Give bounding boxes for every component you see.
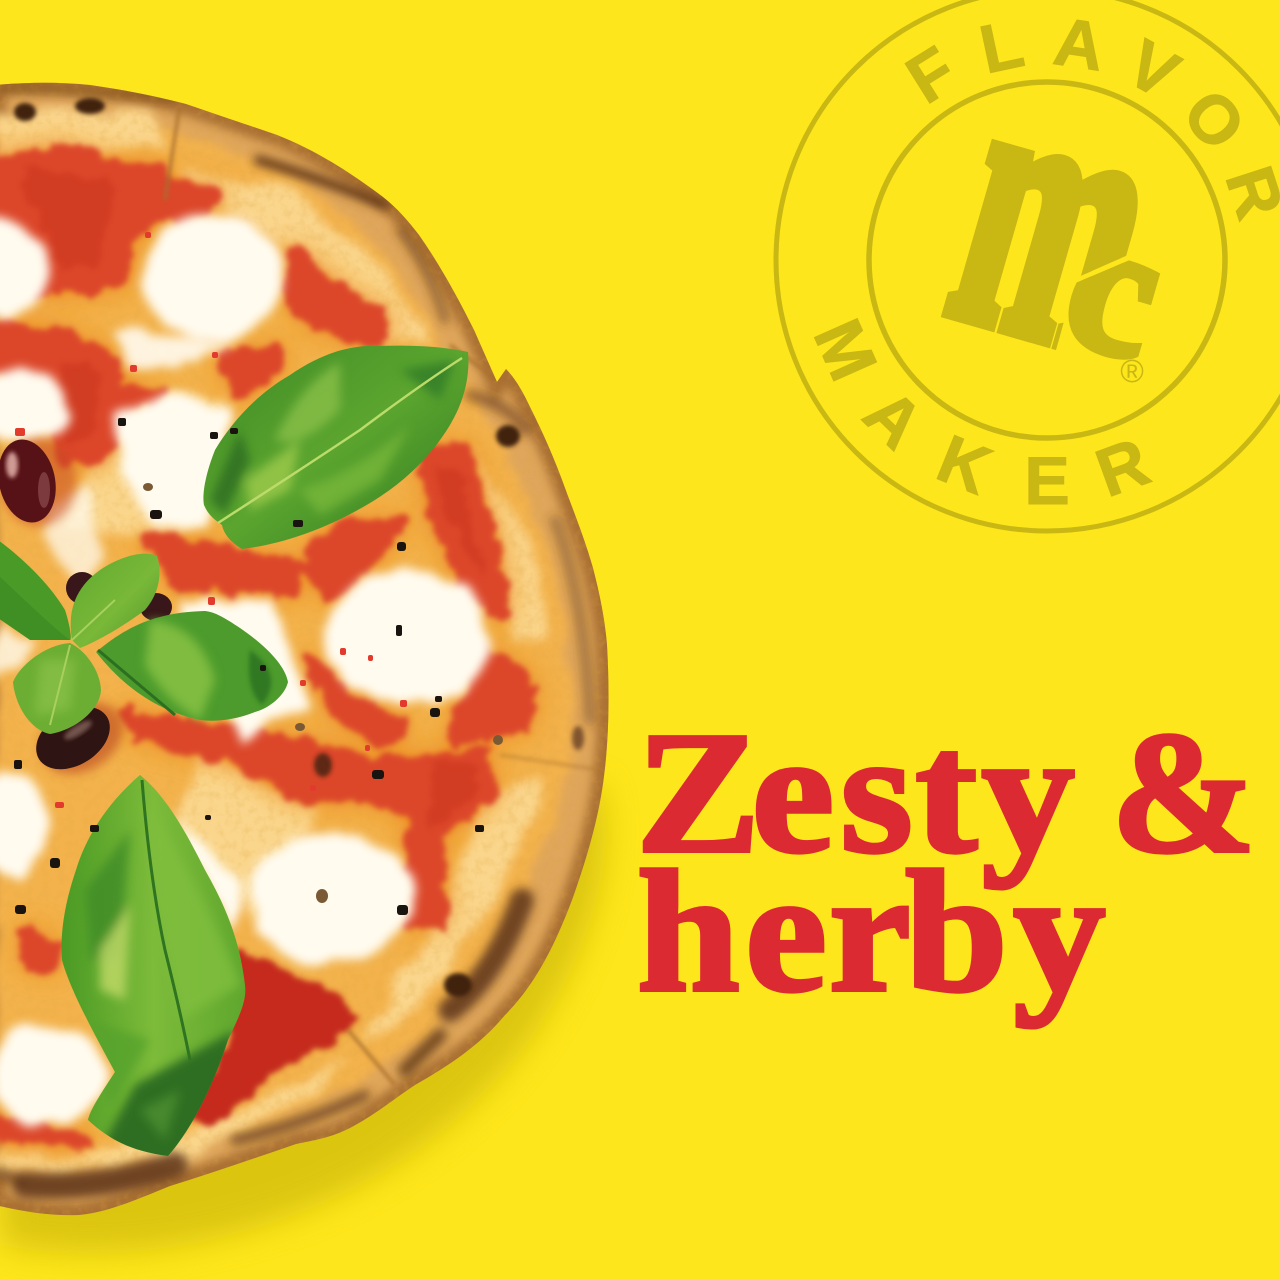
brand monogram	[940, 138, 1160, 360]
basil leaf: large top	[203, 346, 468, 549]
inner cheese base	[0, 120, 572, 1170]
burnt spots on crust	[14, 98, 584, 997]
olive: behind basil	[66, 572, 172, 621]
ring text: FLAVOR: A	[1049, 3, 1109, 86]
ring text: FLAVOR: O	[1168, 75, 1260, 165]
orange gold around sauce	[0, 150, 528, 1143]
crust cut lines	[165, 104, 600, 1085]
inner ring	[869, 82, 1225, 438]
headline line 2: herby	[637, 835, 1106, 1028]
brand monogram: m	[920, 0, 1197, 433]
basil leaf cluster: centre left	[0, 540, 288, 734]
ring text: FLAVOR: F	[894, 32, 969, 118]
leaf right	[96, 611, 288, 721]
leaf lower left	[13, 643, 101, 734]
headline line 1: Zesty	[636, 696, 1075, 889]
tomato sauce patches	[0, 150, 528, 1143]
pizza photo illustration	[0, 70, 620, 1230]
ring text: FLAVOR	[894, 3, 1280, 228]
pale cheese bands	[0, 110, 545, 1175]
darker sauce detail	[20, 170, 485, 830]
ring text: MAKER: R	[1087, 424, 1159, 512]
logo badge: Flavor Maker	[776, 0, 1280, 531]
outer ring	[776, 0, 1280, 531]
leaf left	[0, 540, 71, 640]
headline	[636, 696, 1256, 1028]
grain overlay	[0, 70, 620, 1230]
mozzarella	[0, 217, 489, 1125]
highlights	[210, 360, 455, 515]
ring text: MAKER: M	[799, 309, 891, 391]
ring text: FLAVOR: V	[1114, 25, 1191, 114]
crust outer rim	[0, 83, 609, 1215]
brand monogram: c	[1045, 176, 1184, 401]
basil leaf: lower	[62, 775, 245, 1170]
ring text: MAKER	[799, 309, 1159, 519]
crust char marks	[0, 88, 590, 1186]
olive: lower	[25, 688, 136, 788]
pizza drop shadow	[0, 780, 605, 1253]
ring text: FLAVOR: L	[973, 5, 1030, 88]
crust base	[0, 70, 620, 1230]
pepper flecks and red peppercorns	[14, 232, 503, 915]
ring text: MAKER: K	[927, 420, 1001, 509]
leaf top	[71, 554, 160, 648]
ring text: MAKER: E	[1024, 443, 1070, 519]
olive: upper	[0, 434, 76, 528]
dark sauce under lower basil	[192, 955, 352, 1122]
headline ampersand: &	[1111, 696, 1256, 889]
registered mark: ®	[1120, 353, 1144, 389]
ring text: MAKER: A	[849, 375, 938, 463]
